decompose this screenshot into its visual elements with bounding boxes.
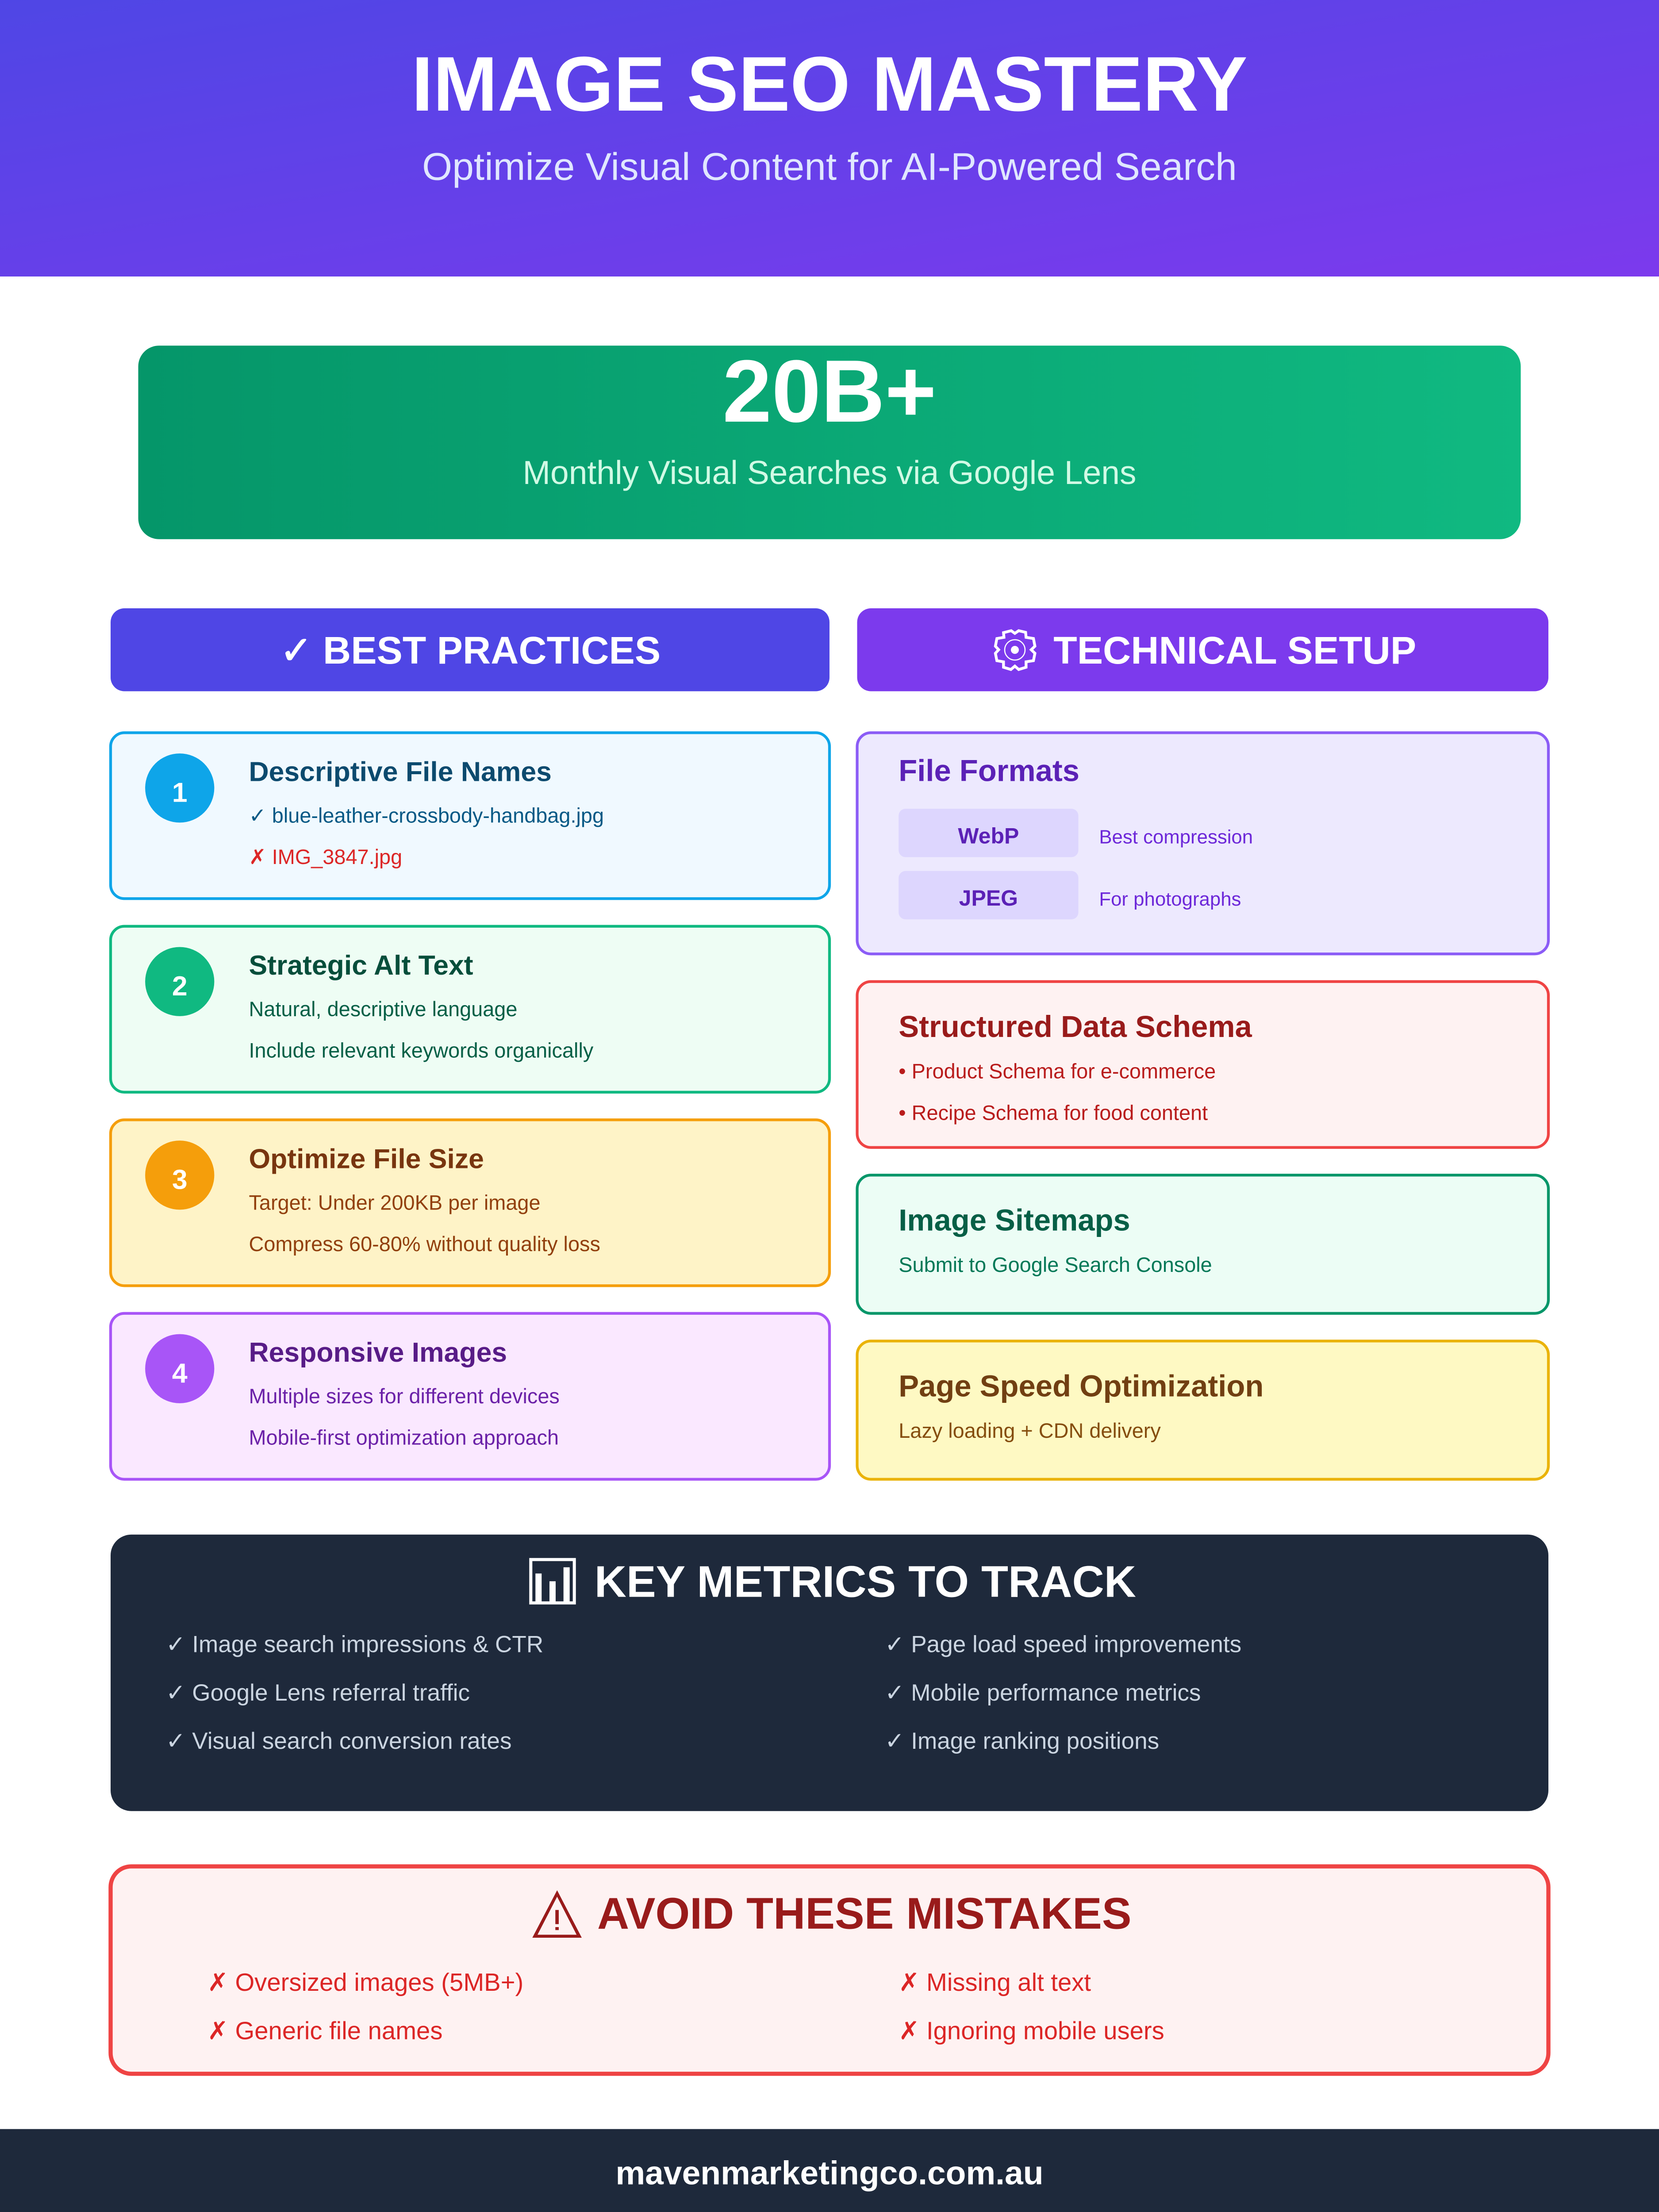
card title: Descriptive File Names [249,757,552,787]
WebP description: Best compression [1099,826,1253,848]
panel: file formats [857,733,1548,954]
heading: technical setup: TECHNICAL SETUP [1053,629,1416,672]
icon: bar chart [531,1559,574,1603]
line: Lazy loading + CDN delivery [899,1419,1161,1442]
number badge 1: 1 [172,777,188,808]
metrics list left: ✓ Google Lens referral traffic [166,1680,470,1706]
card 2: strategic alt text [111,926,830,1092]
number badge 3: 3 [172,1164,188,1195]
line 1: Multiple sizes for different devices [249,1385,560,1408]
JPEG description: For photographs [1099,888,1241,910]
footer [0,2129,1659,2212]
number badge 3 [145,1141,214,1210]
metrics list left: ✓ Visual search conversion rates [166,1728,512,1754]
WebP tag: WebP [958,823,1019,848]
stat number: 20B+ [722,342,937,441]
card title: Responsive Images [249,1337,507,1368]
line 1: Target: Under 200KB per image [249,1191,541,1214]
good example: ✓ blue-leather-crossbody-handbag.jpg [249,804,604,827]
line 1: Natural, descriptive language [249,998,517,1021]
line 2: Mobile-first optimization approach [249,1426,559,1449]
line 2: Compress 60-80% without quality loss [249,1233,600,1256]
JPEG tag: JPEG [959,886,1018,910]
metrics heading: KEY METRICS TO TRACK [595,1557,1136,1606]
metrics list right: ✓ Mobile performance metrics [885,1680,1201,1706]
header banner [0,0,1659,276]
subtitle: Optimize Visual Content for AI-Powered Search [422,145,1237,188]
metrics list right: ✓ Page load speed improvements [885,1631,1241,1657]
icon: warning triangle [532,1890,582,1938]
line 1: • Product Schema for e-commerce [899,1060,1216,1083]
number badge 1 [145,753,214,822]
bad example: ✗ IMG_3847.jpg [249,845,402,868]
panel title: Page Speed Optimization [899,1369,1263,1403]
heading: best practices: ✓ [280,629,312,672]
WebP tag [899,809,1079,857]
mistakes list right: ✗ Missing alt text [899,1968,1091,1996]
panel title: Structured Data Schema [899,1010,1252,1044]
stat caption: Monthly Visual Searches via Google Lens [523,454,1136,491]
card 1: descriptive file names [111,733,830,899]
panel: structured data schema [857,982,1548,1148]
metrics list left [166,1631,543,1754]
card 3: optimize file size [111,1120,830,1286]
number badge 4 [145,1334,214,1403]
panel: avoid these mistakes [111,1866,1548,2074]
icon: gear [995,631,1035,669]
metrics list right [885,1631,1241,1754]
metrics list left: ✓ Image search impressions & CTR [166,1631,543,1657]
mistakes list left [207,1968,523,2044]
JPEG tag [899,871,1079,919]
mistakes list left: ✗ Oversized images (5MB+) [207,1968,523,1996]
metrics list right: ✓ Image ranking positions [885,1728,1159,1754]
line 2: • Recipe Schema for food content [899,1101,1208,1124]
panel title: File Formats [899,754,1079,788]
card 4: responsive images [111,1313,830,1479]
mistakes heading: AVOID THESE MISTAKES [597,1889,1132,1938]
panel: image sitemaps [857,1175,1548,1313]
heading: technical setup [857,608,1548,691]
line: Submit to Google Search Console [899,1253,1212,1276]
title: IMAGE SEO MASTERY [411,41,1248,127]
mistakes list right [899,1968,1164,2044]
mistakes list left: ✗ Generic file names [207,2016,442,2044]
card title: Strategic Alt Text [249,950,473,981]
panel: page speed optimization [857,1341,1548,1479]
number badge 2 [145,947,214,1016]
heading: best practices [111,608,830,691]
stat banner: 20B+ [138,342,1521,539]
mistakes list right: ✗ Ignoring mobile users [899,2016,1164,2044]
panel: key metrics [111,1535,1548,1811]
card title: Optimize File Size [249,1144,484,1175]
panel title: Image Sitemaps [899,1203,1130,1237]
number badge 2: 2 [172,971,188,1002]
number badge 4: 4 [172,1358,188,1389]
heading: best practices: BEST PRACTICES [323,629,661,672]
footer: mavenmarketingco.com.au [615,2154,1044,2191]
line 2: Include relevant keywords organically [249,1039,594,1062]
